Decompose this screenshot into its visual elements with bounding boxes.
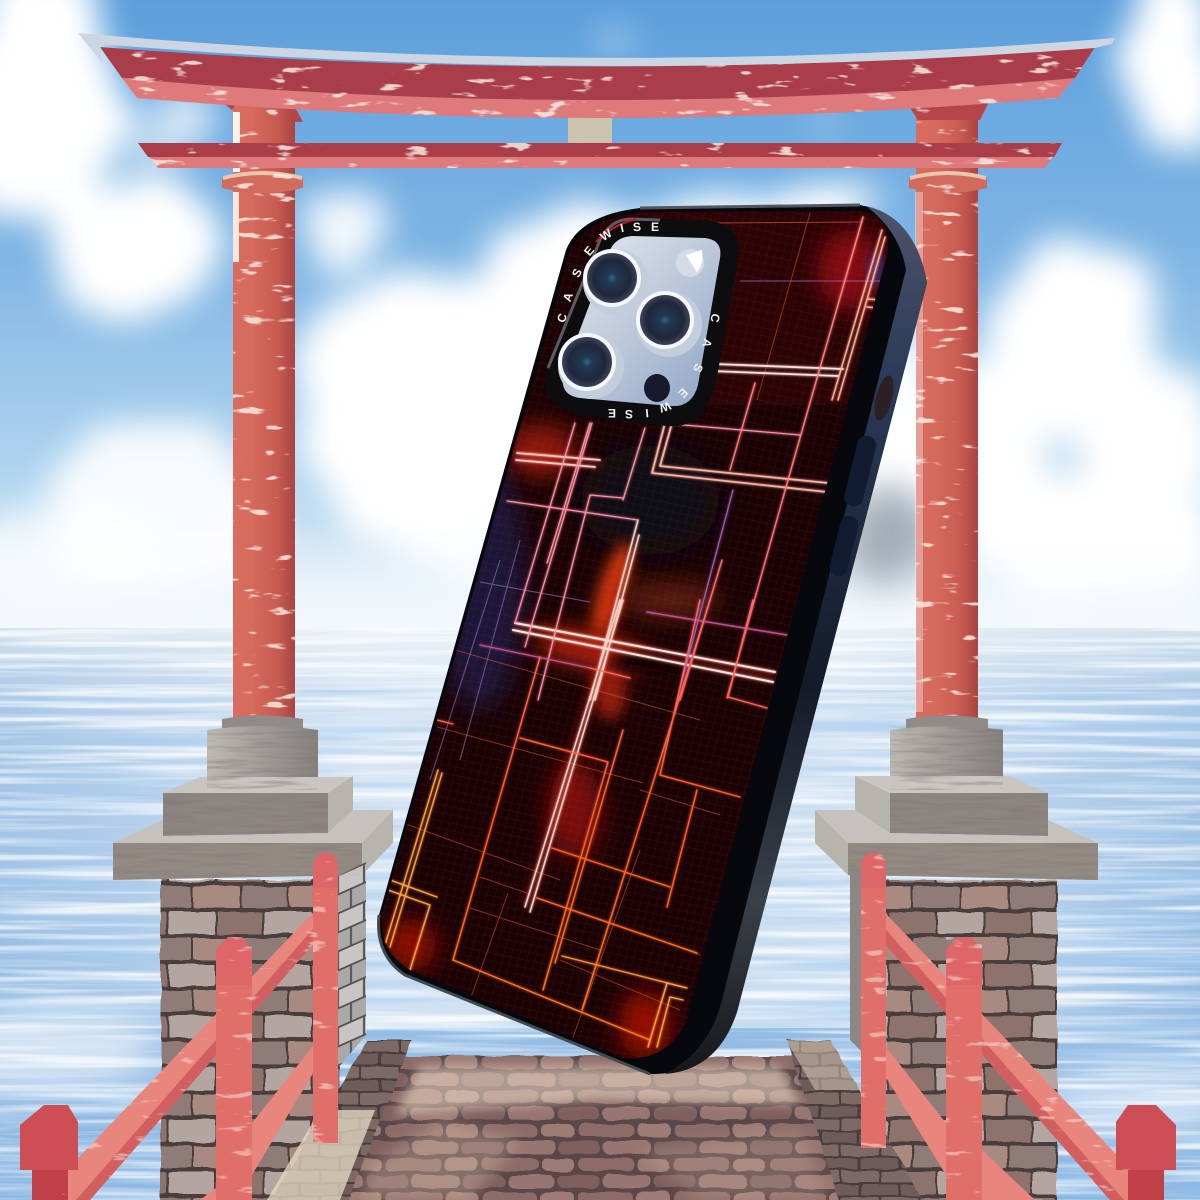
dim accent lines <box>395 213 863 1040</box>
cloud shadow <box>840 485 930 585</box>
lens: top <box>583 249 649 315</box>
brand text around ring: S <box>632 220 642 234</box>
right railing <box>861 853 1176 1200</box>
brand text around ring: I <box>645 406 649 420</box>
brand text around ring: W <box>597 226 615 244</box>
sensor <box>644 374 670 402</box>
brand text around ring <box>554 220 723 421</box>
brand text around ring: S <box>690 361 706 375</box>
brand text around ring: A <box>560 290 576 303</box>
sky background <box>0 0 1200 630</box>
right stone base <box>815 716 1098 1200</box>
red glow under bright lines <box>515 456 775 905</box>
post <box>861 853 886 1148</box>
horizon haze <box>0 520 1200 630</box>
peeling paint <box>91 48 1088 1174</box>
peeling paint on rails <box>62 854 1131 1195</box>
flash <box>676 249 704 277</box>
sea with horizontal streaks <box>0 628 1200 1200</box>
brand text around ring: E <box>651 220 659 234</box>
side buttons <box>828 374 897 578</box>
camera module <box>545 217 739 426</box>
clouds <box>0 0 1200 615</box>
lens: middle <box>636 291 702 357</box>
bright neon lines <box>385 217 885 1047</box>
back artwork: red neon grid <box>382 211 888 1058</box>
camera plate <box>563 236 720 406</box>
phone case <box>360 200 927 1080</box>
end post <box>20 1105 78 1200</box>
post <box>946 937 982 1200</box>
stone walkway <box>265 1040 930 1200</box>
post <box>313 853 338 1143</box>
lower crossbeam (nuki) <box>138 143 1062 168</box>
case body <box>379 205 927 1074</box>
brand text around ring: I <box>619 221 625 235</box>
camera ring <box>545 217 739 426</box>
brand text around ring: E <box>608 406 616 420</box>
brand text around ring: A <box>699 337 715 349</box>
left pillar <box>217 85 303 720</box>
brand text around ring: S <box>625 407 633 421</box>
lens: bottom <box>558 333 624 399</box>
brand text around ring: C <box>554 311 570 324</box>
left stone base <box>113 716 393 1200</box>
post <box>216 937 252 1200</box>
top beam (kasagi) <box>78 33 1115 118</box>
end post <box>1116 1105 1176 1200</box>
brand text around ring: W <box>657 398 673 416</box>
right pillar <box>905 86 990 720</box>
brand text around ring: S <box>569 266 585 280</box>
stone grain <box>113 726 1090 880</box>
brand text around ring: E <box>581 243 597 259</box>
left railing <box>20 853 338 1200</box>
centre strut <box>567 100 613 143</box>
brand text around ring: E <box>675 385 691 401</box>
brand text around ring: C <box>707 313 723 324</box>
